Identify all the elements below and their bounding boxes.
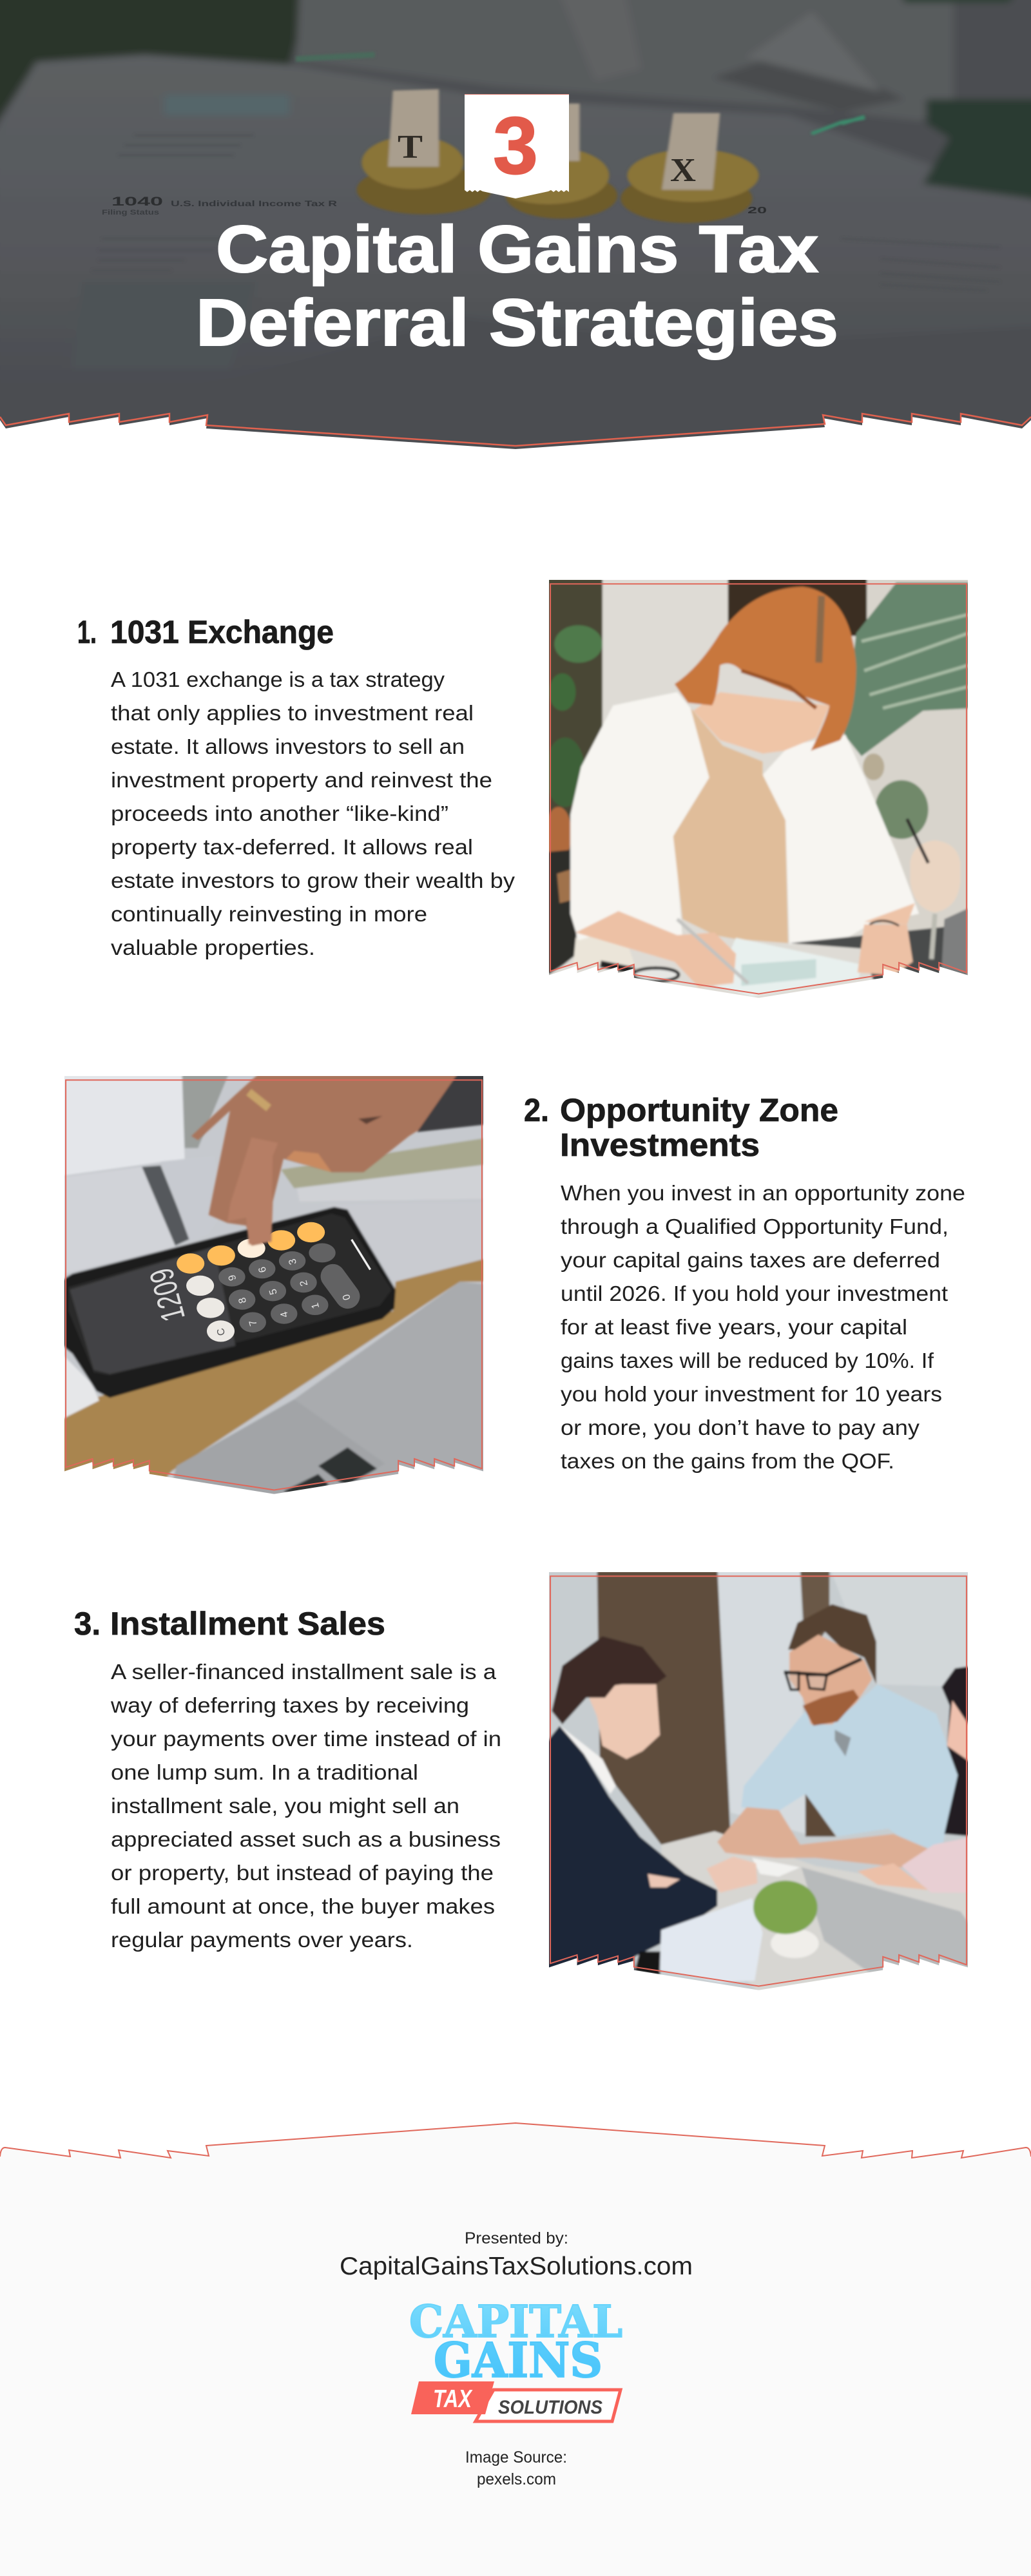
panel: opportunity zone investments [59, 1071, 965, 1501]
heading: Opportunity Zone Investments: 2. [524, 1092, 549, 1128]
photo: woman reviewing documents [544, 575, 974, 1004]
logo: Capital Gains Tax Solutions [409, 2296, 622, 2421]
text block: installment sales description: or property, but instead of paying the [111, 1861, 494, 1885]
heading: Opportunity Zone Investments: Opportunity Zone [560, 1092, 838, 1128]
form number text: 1040 [111, 195, 163, 209]
text block: 1031 exchange description: A 1031 exchange is a tax strategy [111, 668, 445, 691]
keypad digits: 9 [227, 1273, 238, 1282]
keypad digits: 8 [236, 1296, 249, 1305]
text block: 1031 exchange description [111, 668, 516, 959]
text block: opportunity zone description: you hold your investment for 10 years [561, 1382, 942, 1406]
text block: installment sales description [110, 1660, 501, 1952]
icon: T tile letter: T [398, 129, 423, 166]
text block: 1031 exchange description: estate. It allows investors to sell an [111, 735, 465, 758]
photo: hand using calculator phone [59, 1071, 489, 1501]
keypad digits: 7 [247, 1319, 260, 1327]
form title text: U.S. Individual Income Tax R [171, 199, 338, 208]
keypad digits: 5 [267, 1287, 280, 1296]
text block: 1031 exchange description: proceeds into another “like-kind” [111, 802, 448, 825]
text block: 1031 exchange description: property tax-deferred. It allows real [111, 835, 473, 859]
text block: installment sales description: regular payments over years. [111, 1928, 413, 1952]
heading: Opportunity Zone Investments: Investments [560, 1127, 760, 1163]
header accent outline [0, 414, 1031, 446]
heading: Opportunity Zone Investments [524, 1092, 838, 1163]
text block: installment sales description: full amount at once, the buyer makes [111, 1894, 495, 1918]
text block: opportunity zone description: your capital gains taxes are deferred [561, 1248, 940, 1272]
form year text: 20 [747, 205, 767, 216]
panel: 1031 exchange [77, 575, 974, 1004]
text block: opportunity zone description: through a Qualified Opportunity Fund, [561, 1215, 949, 1238]
text block: installment sales description: way of deferring taxes by receiving [110, 1693, 469, 1717]
text block: installment sales description: your payments over time instead of in [111, 1727, 501, 1751]
website: CapitalGainsTaxSolutions.com [340, 2253, 693, 2280]
text block: opportunity zone description: for at least five years, your capital [561, 1315, 907, 1339]
text block: opportunity zone description: until 2026. If you hold your investment [561, 1282, 948, 1305]
keypad digits: 3 [287, 1257, 299, 1265]
phone display digits: 1209 [142, 1264, 192, 1325]
panel: footer [0, 2123, 1031, 2576]
logo: Capital Gains Tax Solutions: TAX [433, 2385, 473, 2413]
panel: installment sales [74, 1567, 974, 1997]
text block: opportunity zone description [561, 1181, 965, 1473]
text block: installment sales description: A seller-financed installment sale is a [111, 1660, 497, 1684]
keypad digits: 4 [278, 1310, 291, 1319]
heading: 1031 Exchange: 1. [77, 614, 97, 650]
keypad digits: 0 [341, 1293, 353, 1302]
ribbon badge with number 3 [465, 94, 569, 198]
logo: Capital Gains Tax Solutions: CAPITAL [409, 2296, 622, 2348]
heading: Installment Sales: Installment Sales [110, 1606, 385, 1642]
icon: X tile letter: X [670, 152, 696, 189]
image source label: Image Source: [465, 2448, 567, 2466]
text block: 1031 exchange description: continually reinvesting in more [111, 902, 427, 926]
title: Capital Gains Tax [216, 212, 818, 286]
text block: 1031 exchange description: valuable properties. [111, 936, 315, 959]
panel: header [0, 0, 1031, 469]
text block: installment sales description: appreciated asset such as a business [111, 1827, 501, 1851]
keypad digits: 2 [298, 1279, 310, 1287]
keypad digits: C [215, 1327, 227, 1337]
heading: Installment Sales: 3. [74, 1606, 101, 1642]
text block: installment sales description: one lump sum. In a traditional [111, 1760, 418, 1784]
heading: 1031 Exchange: 1031 Exchange [110, 614, 334, 650]
keypad digits: 1 [310, 1302, 322, 1310]
keypad digits [215, 1257, 353, 1337]
header background photo [0, 0, 1031, 469]
text block: opportunity zone description: When you invest in an opportunity zone [561, 1181, 965, 1205]
ribbon badge with number 3: 3 [493, 101, 538, 191]
text block: installment sales description: installment sale, you might sell an [111, 1794, 459, 1818]
filing status text: Filing Status [102, 209, 159, 216]
logo: Capital Gains Tax Solutions: GAINS [434, 2333, 602, 2389]
footer background with torn edge [0, 2123, 1031, 2576]
text block: opportunity zone description: gains taxes will be reduced by 10%. If [561, 1349, 934, 1372]
text block: 1031 exchange description: that only applies to investment real [111, 701, 474, 725]
text block: 1031 exchange description: investment property and reinvest the [111, 768, 492, 792]
presented by label: Presented by: [465, 2229, 568, 2247]
keypad digits: 6 [256, 1265, 269, 1274]
text block: 1031 exchange description: estate investors to grow their wealth by [111, 869, 516, 892]
text block: opportunity zone description: taxes on the gains from the QOF. [561, 1449, 894, 1473]
title [196, 212, 838, 360]
logo: Capital Gains Tax Solutions: SOLUTIONS [498, 2397, 602, 2418]
text block: opportunity zone description: or more, you don’t have to pay any [561, 1416, 920, 1439]
image source value: pexels.com [477, 2470, 556, 2488]
title: Deferral Strategies [196, 285, 838, 360]
photo: advisor meeting with clients [544, 1567, 974, 1997]
